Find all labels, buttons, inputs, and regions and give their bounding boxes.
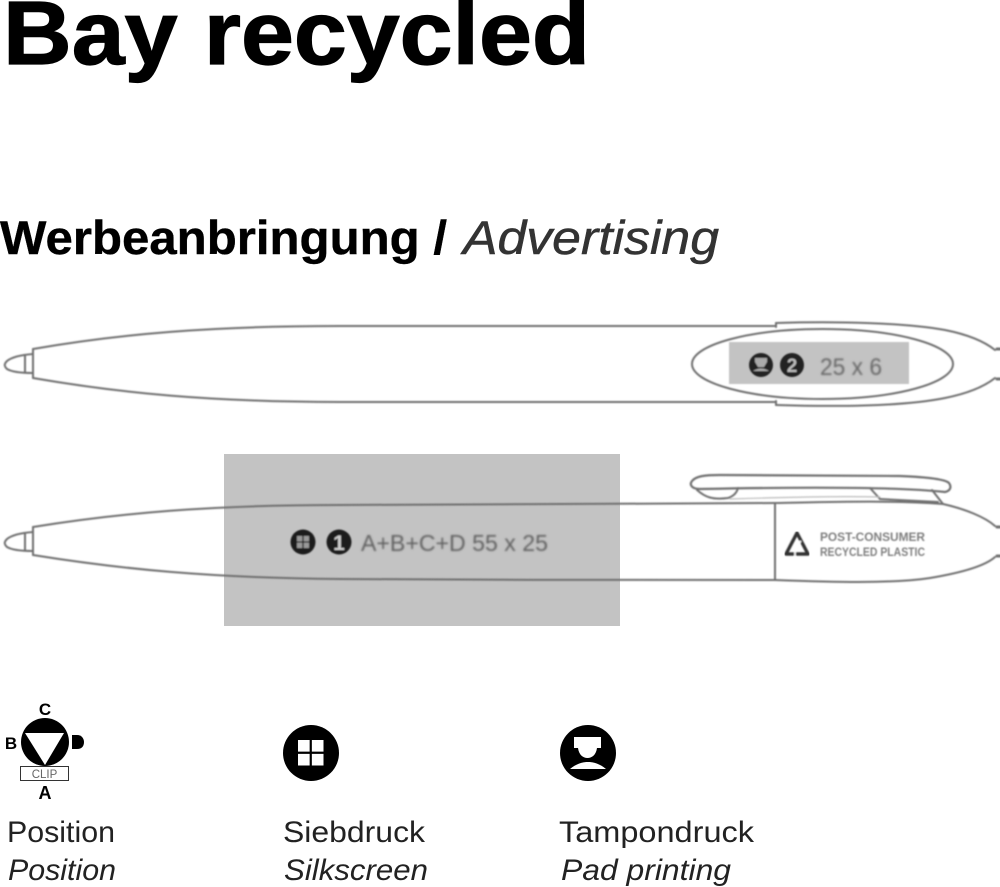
icon: position 2 badge: 2 bbox=[787, 356, 797, 377]
section heading: advertising bbox=[0, 211, 719, 264]
size text A+B+C+D 55 x 25: A+B+C+D 55 x 25 bbox=[361, 530, 548, 556]
icon: pad printing badge bbox=[749, 353, 773, 377]
section heading: advertising: Advertising bbox=[460, 211, 719, 264]
section heading: advertising: Werbeanbringung / bbox=[0, 211, 447, 264]
icon: position diagram: CLIP bbox=[32, 769, 58, 781]
pen drawing: top view bbox=[5, 322, 1000, 406]
icon: position 1 badge: 1 bbox=[333, 532, 345, 555]
size text 25 x 6: 25 x 6 bbox=[820, 354, 882, 381]
icon: pad printing bbox=[560, 725, 616, 781]
legend: position bbox=[5, 700, 116, 887]
recycled plastic text: POST-CONSUMER bbox=[820, 532, 926, 544]
imprint label: top pen, 25 x 6 bbox=[749, 353, 882, 381]
imprint area: top pen clip, 25 x 6 bbox=[729, 342, 909, 384]
icon: position diagram bbox=[5, 700, 84, 803]
label: position: Position bbox=[7, 816, 115, 849]
icon: silkscreen bbox=[283, 725, 339, 781]
icon: position 1 badge bbox=[326, 530, 352, 555]
recycled plastic text bbox=[820, 532, 926, 559]
pen drawing: side view bbox=[5, 475, 1000, 582]
icon: position diagram: C bbox=[39, 700, 51, 719]
label: Siebdruck: Siebdruck bbox=[283, 816, 426, 849]
label: Silkscreen: Silkscreen bbox=[284, 854, 428, 887]
icon: silkscreen badge bbox=[290, 530, 316, 554]
legend: silkscreen bbox=[283, 725, 428, 887]
icon: position diagram: A bbox=[38, 783, 52, 803]
icon: position diagram: B bbox=[5, 734, 17, 753]
label: position, English: Position bbox=[8, 854, 116, 887]
legend: pad printing bbox=[559, 725, 755, 887]
icon: recycling triangle bbox=[786, 533, 808, 557]
label: Pad printing: Pad printing bbox=[561, 854, 731, 887]
imprint label: barrel, A+B+C+D 55 x 25 bbox=[290, 530, 548, 556]
pen clip bbox=[691, 475, 950, 504]
label: Tampondruck: Tampondruck bbox=[559, 816, 755, 849]
recycled plastic text: RECYCLED PLASTIC bbox=[820, 547, 925, 559]
imprint area: barrel, 55 x 25 bbox=[224, 454, 620, 626]
